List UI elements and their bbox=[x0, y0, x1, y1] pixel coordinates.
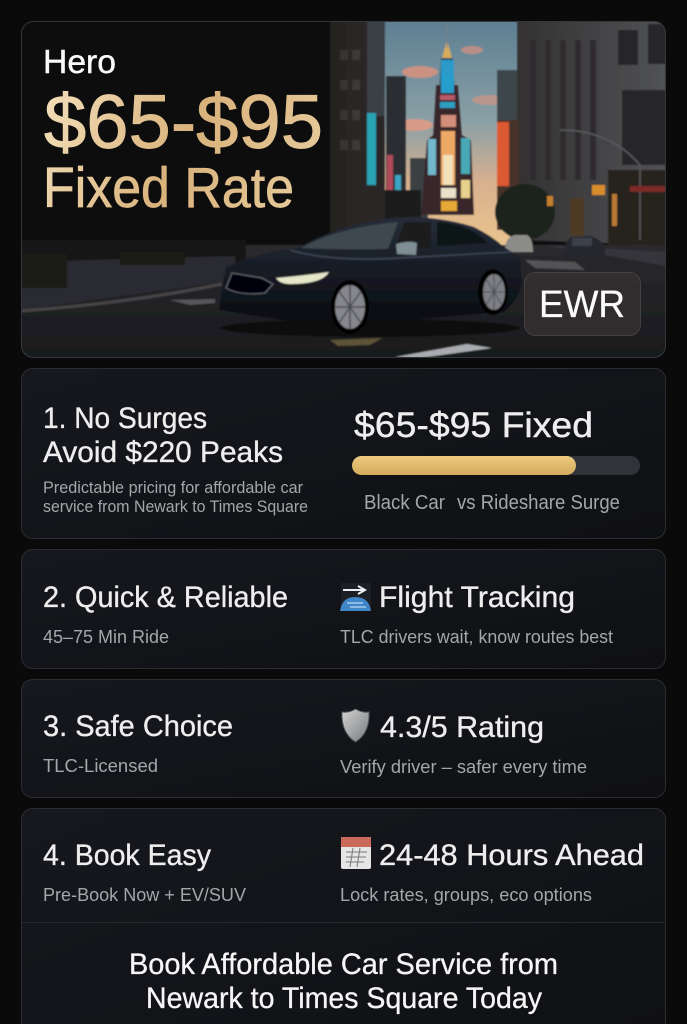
heading: 2. Quick & Reliable bbox=[43, 581, 288, 614]
black sedan bbox=[219, 217, 522, 337]
licence: TLC-Licensed bbox=[43, 755, 158, 776]
hero panel bbox=[21, 21, 666, 358]
description: service from Newark to Times Square bbox=[43, 498, 308, 516]
price heading: $65-$95 Fixed bbox=[354, 405, 593, 445]
rating heading: 4.3/5 Rating bbox=[380, 711, 544, 744]
comparison bar bbox=[352, 456, 640, 475]
hero fixed rate: Fixed Rate bbox=[43, 156, 294, 220]
flight tracking heading: Flight Tracking bbox=[379, 581, 575, 614]
EWR badge: EWR bbox=[539, 284, 625, 326]
hours description: Lock rates, groups, eco options bbox=[340, 884, 592, 905]
panel 4: book easy and call to action bbox=[22, 808, 666, 1024]
call to action: Newark to Times Square Today bbox=[146, 982, 542, 1015]
bar caption: vs Rideshare Surge bbox=[457, 492, 620, 514]
description: Predictable pricing for affordable car bbox=[43, 479, 303, 497]
EWR badge bbox=[524, 272, 640, 336]
panel 3: safe choice bbox=[22, 680, 666, 798]
bar caption: Black Car bbox=[364, 492, 445, 514]
heading: 3. Safe Choice bbox=[43, 710, 233, 743]
icon: calendar bbox=[341, 837, 371, 869]
call to action bbox=[129, 948, 558, 1015]
heading: no surges: 1. No Surges bbox=[43, 402, 207, 435]
heading: no surges: Avoid $220 Peaks bbox=[43, 436, 283, 469]
ride time: 45–75 Min Ride bbox=[43, 626, 169, 647]
icon: flight arrow bbox=[340, 583, 371, 611]
heading: no surges bbox=[43, 402, 283, 469]
panel 1: no surges bbox=[22, 368, 666, 538]
pre-book: Pre-Book Now + EV/SUV bbox=[43, 884, 247, 905]
flight description: TLC drivers wait, know routes best bbox=[340, 626, 613, 647]
rating description: Verify driver – safer every time bbox=[340, 756, 587, 777]
bar caption bbox=[364, 492, 620, 514]
hero price: $65-$95 bbox=[44, 80, 323, 165]
icon: shield bbox=[342, 709, 369, 742]
hero label: Hero bbox=[43, 43, 116, 80]
panel 2: quick and reliable bbox=[22, 550, 666, 668]
description bbox=[43, 479, 308, 516]
call to action: Book Affordable Car Service from bbox=[129, 948, 558, 981]
hero border bbox=[22, 22, 666, 358]
hero photo: Times Square street scene bbox=[21, 21, 666, 358]
hours heading: 24-48 Hours Ahead bbox=[379, 839, 644, 872]
heading: 4. Book Easy bbox=[43, 839, 211, 872]
